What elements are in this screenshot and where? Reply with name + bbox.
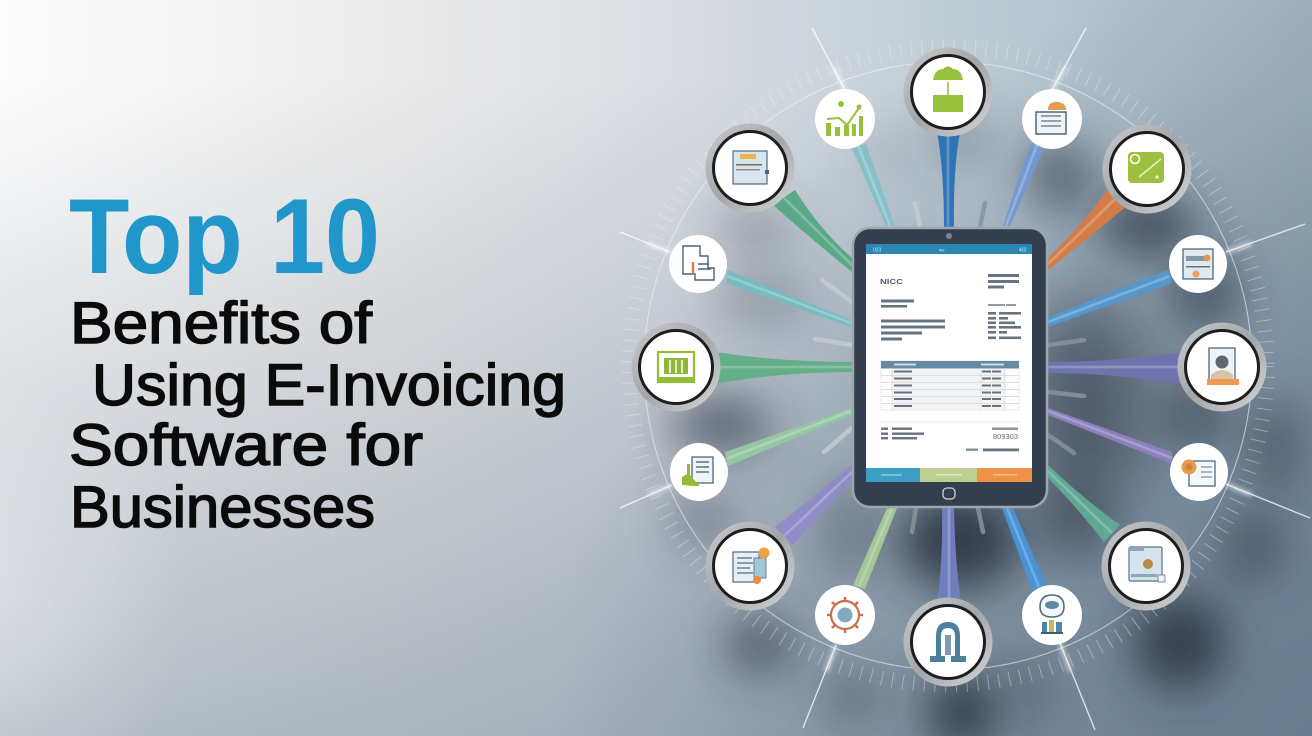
beam highlights [715,135,1185,604]
beam: lower-right teal [1048,465,1120,542]
invoice screen [866,244,1032,482]
beam: small lower-right purple [1048,408,1172,464]
invoice heading: NICC [880,277,904,286]
node: left (large) [635,326,717,408]
node: lower left (large) [709,525,791,607]
icon: folder window [1129,547,1165,582]
beam: small bottom-right blue [1002,508,1046,590]
icon: sign board [1036,102,1066,134]
subtitle line 3: Software for [69,413,423,478]
node: left-upper (small) [669,235,727,293]
icon: green framed chart [658,352,694,382]
beam: small left teal [726,270,851,327]
beam: right indigo [1048,352,1185,384]
node: top-left (small) [815,89,875,149]
icon: green umbrella and box [933,66,963,112]
screen header: 4/3 [1019,248,1026,254]
beam: small bottom-left pale green [853,508,897,589]
node: bottom (large) [907,601,989,683]
icon: blue arch monument [930,622,966,662]
icon: orange gear globe [827,597,863,633]
icon: cloud over city [1040,595,1064,634]
node: bottom-right (small) [1022,585,1082,645]
node: bottom-left (small) [815,585,875,645]
heading: Top 10: Top 10 [69,176,380,296]
beam: top blue [937,132,960,228]
node: top (large) [907,51,989,133]
screen header: ws [939,248,945,252]
tablet [853,228,1047,507]
invoice lines [881,274,1021,340]
screen header [866,244,1032,254]
invoice totals [881,422,1019,451]
beam: small top-right blue [1003,145,1045,226]
icon: browser panels [1183,249,1213,279]
node: upper right (large) [1106,128,1188,210]
screen header: 023 [873,248,882,254]
screen footer [866,468,1032,482]
beam: small right blue [1048,270,1172,327]
beam: lower-left lavender [775,465,852,545]
icon: document with badge [733,548,770,584]
icon: certificate with seal [1182,460,1215,486]
icon: profile card [1207,348,1239,385]
node: right-lower (small) [1170,443,1228,501]
camera [946,233,952,239]
icon: stacked documents [683,246,714,280]
node: left-lower (small) [670,443,728,501]
beam: bottom indigo [937,508,961,604]
beam: small lower-left pale green [725,408,851,466]
icon: green card [1128,152,1164,183]
node: lower right (large) [1105,525,1187,607]
invoice totals: 809303 [993,434,1018,441]
beam: left green [715,352,852,384]
icon: document with green figure [682,457,713,486]
invoice table [881,361,1019,410]
small grey connector stubs [815,203,1084,532]
node: upper left (large) [709,127,791,209]
subtitle line 1: Benefits of [70,291,373,356]
subtitle line 2: Using E-Invoicing [92,353,566,418]
soft shadows behind diagram [671,114,1303,736]
dial ring with tick marks [629,47,1267,685]
connector beams [715,132,1185,604]
icon: document panel [733,151,769,184]
beam: small top-left teal [851,144,895,226]
light flares [620,28,1310,730]
title [69,176,566,540]
home button [943,488,955,499]
tablet body [853,228,1047,507]
node: top-right (small) [1022,89,1082,149]
icon: green bar chart [826,101,863,136]
node: right-upper (small) [1169,235,1227,293]
subtitle line 4: Businesses [70,475,375,540]
beam: upper-right orange [1048,190,1124,270]
node: right (large) [1181,326,1263,408]
beam: upper-left green [773,190,852,272]
